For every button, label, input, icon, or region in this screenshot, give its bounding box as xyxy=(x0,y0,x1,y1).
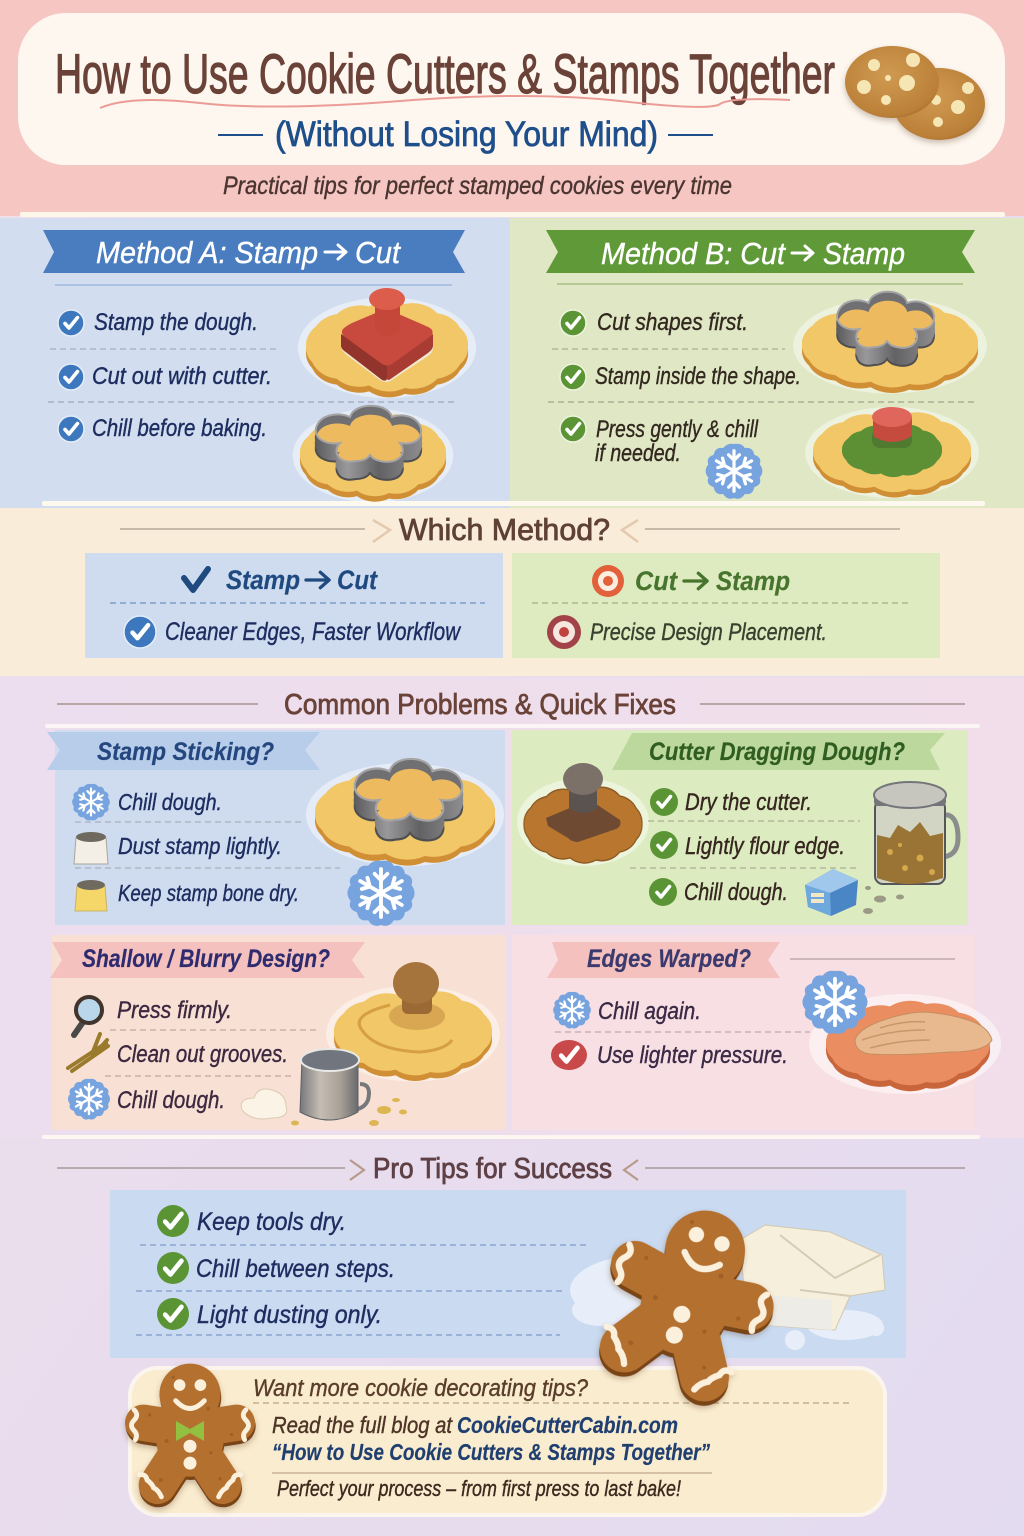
panel: Cutter Dragging Dough xyxy=(512,730,968,925)
step list: Lightly flour edge. xyxy=(685,833,845,860)
icon: yellow jar xyxy=(75,880,107,911)
icon: target xyxy=(547,615,581,649)
crumbs xyxy=(863,886,904,914)
tip 2 xyxy=(157,1252,395,1284)
step list: Chill dough. xyxy=(684,879,788,906)
banner: Cutter Dragging Dough? xyxy=(649,738,905,766)
step: press gently xyxy=(560,416,759,467)
step: stamp the dough: Stamp the dough. xyxy=(94,309,258,336)
panel: Edges Warped: Chill again. xyxy=(598,998,701,1025)
panel: Pro Tips list xyxy=(110,1190,906,1358)
tip 1 xyxy=(157,1205,346,1237)
panel: Stamp then Cut comparison xyxy=(85,553,503,658)
banner: Method B: Stamp xyxy=(823,236,905,271)
heading: Which Method: Which Method? xyxy=(399,512,610,547)
panel: Cut then Stamp comparison xyxy=(512,553,940,658)
icon: red check xyxy=(551,1040,587,1070)
banner: Shallow / Blurry Design? xyxy=(82,945,330,973)
panel: Stamp Sticking xyxy=(47,730,505,926)
header panel xyxy=(18,13,1005,165)
panel: Shallow / Blurry Design: Chill dough. xyxy=(117,1087,225,1114)
footer question: Want more cookie decorating tips? xyxy=(253,1375,589,1402)
illustration: small gingerbread man with bow tie xyxy=(132,1364,248,1497)
comparison heading: Stamp xyxy=(716,566,790,596)
comparison heading: Cut xyxy=(337,565,378,595)
step list xyxy=(630,788,860,906)
icon: broom twigs xyxy=(68,1034,108,1071)
heading: Which Method xyxy=(120,512,900,547)
tip 2: Chill between steps. xyxy=(196,1255,395,1283)
illustration: kitchen towel xyxy=(740,1225,885,1330)
panel: Stamp Sticking: Chill dough. xyxy=(118,789,222,815)
panel: Shallow / Blurry Design xyxy=(50,935,505,1130)
panel: Shallow / Blurry Design: Press firmly. xyxy=(117,997,232,1024)
icon: magnifying glass xyxy=(74,997,102,1035)
panel: Stamp Sticking: Dust stamp lightly. xyxy=(118,833,282,859)
comparison heading xyxy=(226,565,378,595)
icon: butter cube xyxy=(805,869,858,916)
icon: orange spiral target xyxy=(592,565,624,597)
tagline: Practical tips for perfect stamped cookies every time xyxy=(223,172,732,200)
illustration: hand pressing dough xyxy=(809,994,1001,1094)
illustration: wooden stamp on dough xyxy=(326,962,500,1082)
step: cut out: Cut out with cutter. xyxy=(92,363,272,390)
icon: two cookies xyxy=(845,46,985,140)
panel: Method A xyxy=(43,230,476,502)
bow tie xyxy=(176,1421,204,1441)
blog line xyxy=(272,1412,678,1438)
banner: Method A xyxy=(43,230,465,273)
step list: Dry the cutter. xyxy=(685,789,812,816)
icon: snowflake large xyxy=(802,971,868,1034)
illustration: brown stamp on cookie xyxy=(517,763,649,866)
blog title: “How to Use Cookie Cutters & Stamps Together” xyxy=(272,1439,710,1465)
illustration: cutter on dough xyxy=(293,406,453,502)
step: chill: Chill before baking. xyxy=(92,415,267,442)
icon: snowflake xyxy=(706,444,762,499)
illustration: cutter on dough xyxy=(793,292,987,394)
illustration: cutter on dough xyxy=(306,759,504,866)
banner xyxy=(547,942,780,978)
step: stamp inside: Stamp inside the shape. xyxy=(595,363,801,390)
icon: check mark xyxy=(184,569,208,590)
step: cut shapes: Cut shapes first. xyxy=(597,309,748,336)
icon: blue check xyxy=(124,616,156,648)
banner xyxy=(612,733,945,770)
step: press gently: if needed. xyxy=(595,440,681,467)
icon: snowflake xyxy=(68,1079,110,1120)
illustration: large gingerbread man xyxy=(587,1187,791,1403)
panel: Edges Warped xyxy=(512,935,1001,1130)
heading: Common Problems: Common Problems & Quick Fixes xyxy=(284,689,676,721)
banner: Stamp Sticking? xyxy=(97,738,274,766)
blog line: Read the full blog at xyxy=(272,1412,453,1438)
banner: Method B xyxy=(546,230,975,273)
panel: Edges Warped: Use lighter pressure. xyxy=(597,1042,788,1069)
banner: Edges Warped? xyxy=(587,945,751,973)
comparison heading xyxy=(635,566,790,596)
tip 3 xyxy=(157,1298,382,1330)
heading: Pro Tips: Pro Tips for Success xyxy=(373,1153,612,1185)
illustration: flour shaker xyxy=(874,782,958,884)
icon: snowflake xyxy=(72,784,110,821)
comparison heading: Stamp xyxy=(226,565,300,595)
tip 1: Keep tools dry. xyxy=(197,1208,346,1236)
comparison heading: Cut xyxy=(635,566,678,596)
banner xyxy=(47,732,320,770)
illustration: red stamp on dough xyxy=(298,288,476,398)
illustration: flour pile xyxy=(241,1089,287,1119)
step: press gently: Press gently & chill xyxy=(596,416,759,443)
panel: Stamp Sticking: Keep stamp bone dry. xyxy=(118,880,299,906)
panel: Method B xyxy=(546,230,987,499)
panel: Cut then Stamp comparison: Precise Design Placement. xyxy=(590,619,827,646)
wavy title underline xyxy=(100,96,790,108)
panel: footer call to action xyxy=(130,1368,885,1515)
illustration: flour dusting xyxy=(570,1254,884,1350)
tip 3: Light dusting only. xyxy=(197,1301,382,1329)
banner: Method A: Cut xyxy=(355,235,401,270)
closing line: Perfect your process – from first press to last bake! xyxy=(277,1476,681,1501)
banner xyxy=(50,942,365,978)
panel: Stamp then Cut comparison: Cleaner Edges, Faster Workflow xyxy=(165,618,462,646)
crumbs xyxy=(291,1098,407,1126)
icon: snowflake xyxy=(553,992,591,1029)
heading: Pro Tips xyxy=(57,1153,965,1185)
banner: Method B: Method B: Cut xyxy=(601,236,786,271)
subtitle: (Without Losing Your Mind) xyxy=(275,115,658,154)
illustration: metal mug xyxy=(300,1049,369,1120)
icon: snowflake large xyxy=(347,861,415,926)
illustration: green dough and red stamp xyxy=(805,407,979,498)
blog line: CookieCutterCabin.com xyxy=(457,1412,678,1438)
panel: Shallow / Blurry Design: Clean out grooves. xyxy=(117,1041,288,1068)
icon: flour jar xyxy=(74,832,108,864)
banner: Method A: Method A: Stamp xyxy=(96,235,318,270)
